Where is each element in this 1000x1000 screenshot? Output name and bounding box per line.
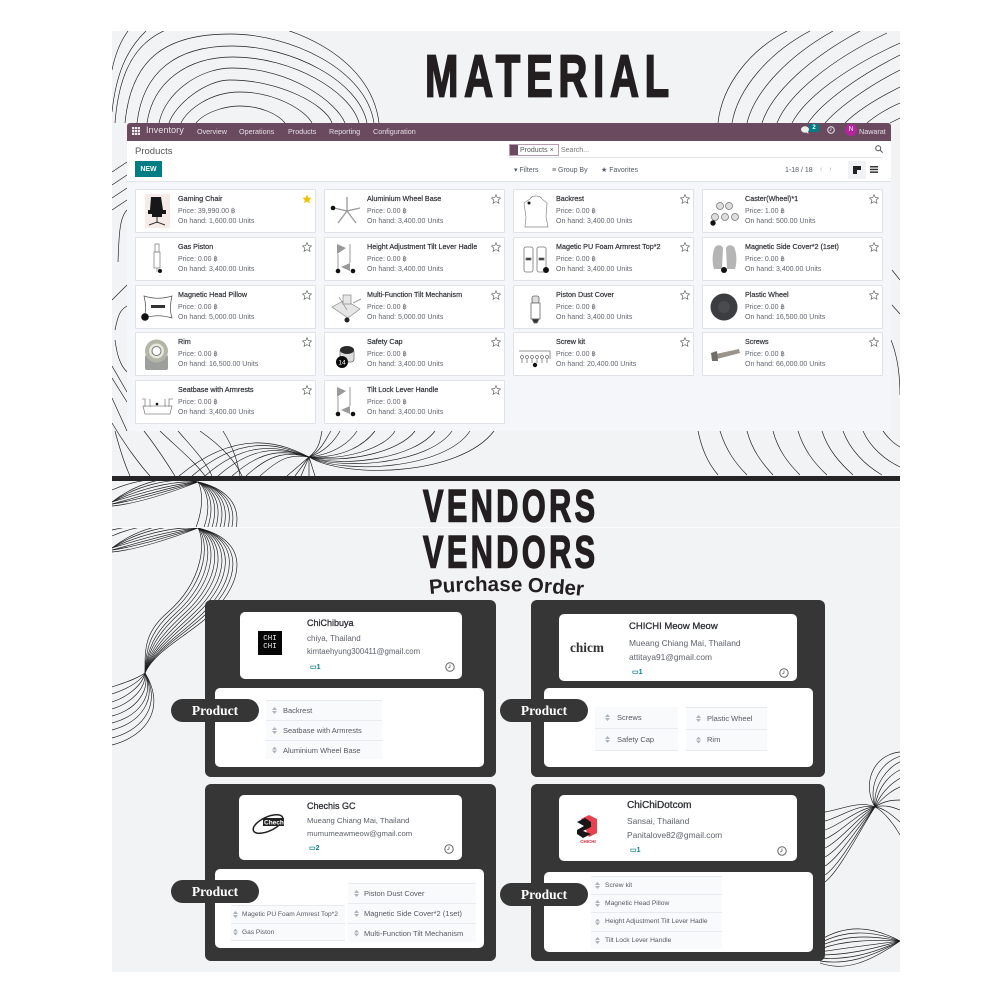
product card: Gas Piston: Price: 0.00 ฿ [178,256,218,263]
vendor name: ChiChibuya [307,618,354,628]
product card: Seatbase with Armrests: Seatbase with Armrests [178,385,254,394]
vendor email: mumumeawmeow@gmail.com [307,829,412,838]
product card: Backrest: Backrest [556,194,584,203]
vendor name: ChiChiDotcom [627,800,691,811]
decorative contour waves [112,31,900,967]
chat badge [809,124,819,132]
product card: Piston Dust Cover [513,285,694,329]
vendor card: ChiChiDotcom [559,795,797,861]
page title: Products: Products [135,146,172,157]
product card: Height Adjustment Tilt Lever Hadle: Height Adjustment Tilt Lever Hadle [367,242,477,251]
product card: Magnetic Side Cover*2 (1set): On hand: 3,400.00 Units [745,266,821,273]
purchase order count: ▭2 [309,845,320,852]
vendor address: Mueang Chiang Mai, Thailand [629,638,741,648]
product card: Aluminium Wheel Base [324,189,505,233]
row: Screws [595,707,678,729]
product card: Backrest: Price: 0.00 ฿ [556,208,596,215]
vendor card: CHICHI Meow Meow [559,614,797,681]
label pill: Product: Product [192,884,238,899]
purchase order count: ▭1 [310,664,321,671]
row: Gas Piston [231,923,345,941]
subtitle: Purchase Order [430,576,584,596]
product card: Safety Cap [324,332,505,376]
control panel [127,141,891,182]
row: Aluminium Wheel Base: Aluminium Wheel Base [283,746,361,755]
product card: Magnetic Head Pillow: On hand: 5,000.00 Units [178,314,254,321]
product card: Multi-Function Tilt Mechanism [324,285,505,329]
product card: Aluminium Wheel Base: On hand: 3,400.00 Units [367,218,443,225]
product card: Magnetic Side Cover*2 (1set): Price: 0.00 ฿ [745,256,785,263]
product card: Screws: Price: 0.00 ฿ [745,351,785,358]
search placeholder: Search... [561,147,589,154]
chat badge: 2 [812,125,816,131]
product card: Piston Dust Cover: Price: 0.00 ฿ [556,304,596,311]
label pill: Product [171,699,259,722]
product card: Gas Piston: Gas Piston [178,242,213,251]
product card: Seatbase with Armrests [135,380,316,424]
product card: Multi-Function Tilt Mechanism: Multi-Function Tilt Mechanism [367,290,462,299]
icon: app grid [132,127,140,135]
product card: Rim: Rim [178,337,191,346]
row: Gas Piston: Gas Piston [242,929,274,936]
product card: Height Adjustment Tilt Lever Hadle [324,237,505,281]
vendor email: Panitalove82@gmail.com [627,830,722,840]
row: Rim: Rim [707,735,720,744]
product card: Screws: Screws [745,337,769,346]
vendor email: kimtaehyung300411@gmail.com [307,647,420,656]
label pill: Product [500,699,588,722]
product card: Magnetic Head Pillow [135,285,316,329]
product card: Gas Piston [135,237,316,281]
product card: Rim [135,332,316,376]
product card: Magnetic Head Pillow: Price: 0.00 ฿ [178,304,218,311]
filter: Favorites: ★ Favorites [601,167,638,174]
row: Magnetic Head Pillow: Magnetic Head Pillow [605,900,669,907]
row: Seatbase with Armrests [266,720,382,740]
product card: Magetic PU Foam Armrest Top*2 [513,237,694,281]
product list: ChiChibuya [266,700,382,755]
row: Magnetic Side Cover*2 (1set) [348,903,476,923]
logo: Chechis [252,814,287,834]
product card: Gaming Chair: Price: 39,990.00 ฿ [178,208,235,215]
vendor panel: Chechis GC [205,784,496,961]
row: Tilt Lock Lever Handle [591,931,722,949]
icon: magnifier [875,145,883,153]
user name: Nawarat [859,127,886,136]
product card: Caster(Wheel)*1: Caster(Wheel)*1 [745,194,798,203]
product list: CHICHI Meow Meow [595,707,767,751]
purchase order count: ▭1 [630,847,641,854]
row: Height Adjustment Tilt Lever Hadle: Height Adjustment Tilt Lever Hadle [605,918,708,925]
product card: Plastic Wheel: Plastic Wheel [745,290,789,299]
filter: Group By: ≡ Group By [552,167,588,174]
subtitle: Purchase Order: Purchase Order [430,576,584,596]
vendor email: attitaya91@gmail.com [629,652,712,662]
icon: clock [777,846,787,856]
product card: Height Adjustment Tilt Lever Hadle: Price: 0.00 ฿ [367,256,407,263]
product card: Caster(Wheel)*1: On hand: 500.00 Units [745,218,816,225]
title: VENDORS upper: VENDORS [423,482,595,532]
product card: Magetic PU Foam Armrest Top*2: On hand: 3,400.00 Units [556,266,632,273]
search filter tag: Products × [520,147,554,154]
row: Backrest: Backrest [283,706,312,715]
background panel [112,31,900,972]
product card: Seatbase with Armrests: Price: 0.00 ฿ [178,399,218,406]
product card: Seatbase with Armrests: On hand: 3,400.00 Units [178,409,254,416]
label pill: Product: Product [521,703,567,718]
product card: Plastic Wheel: Price: 0.00 ฿ [745,304,785,311]
vendor name: Chechis GC [307,801,356,811]
user avatar: N [848,126,854,133]
product card: Screw kit: Screw kit [556,337,585,346]
product card: Backrest [513,189,694,233]
vendor address: Mueang Chiang Mai, Thailand [307,816,409,825]
vendor card: ChiChibuya [240,612,462,679]
nav: Inventory: Inventory [146,125,184,135]
nav bar [127,123,891,141]
logo: chichi wordmark: chicm [570,641,604,656]
view toggle: kanban active [848,161,866,179]
product card: Screws: On hand: 66,000.00 Units [745,361,825,368]
pager arrows: ‹ › [820,166,832,173]
products panel: Chechis GC [215,869,484,948]
product card: Height Adjustment Tilt Lever Hadle: On hand: 3,400.00 Units [367,266,443,273]
label pill: Product [171,880,259,903]
row: Plastic Wheel: Plastic Wheel [707,714,752,723]
logo: CHI CHI [258,631,282,655]
product card: Aluminium Wheel Base: Aluminium Wheel Base [367,194,441,203]
product card: Aluminium Wheel Base: Price: 0.00 ฿ [367,208,407,215]
vendor name: CHICHI Meow Meow [629,621,718,632]
row: Safety Cap: Safety Cap [617,735,654,744]
products panel: CHICHI Meow Meow [544,688,813,767]
view toggle: list [870,166,878,173]
vendor panel: ChiChibuya [205,600,496,777]
pager: 1-18 / 18 [785,167,813,174]
product card: Tilt Lock Lever Handle: On hand: 3,400.00 Units [367,409,443,416]
nav: Overview: Overview [197,127,227,136]
icon: clock [444,844,454,854]
product card: Gas Piston: On hand: 3,400.00 Units [178,266,254,273]
product card: Piston Dust Cover: Piston Dust Cover [556,290,614,299]
row: Screw kit: Screw kit [605,882,632,889]
product card: Safety Cap: On hand: 3,400.00 Units [367,361,443,368]
products panel: ChiChiDotcom [544,872,813,952]
product card: Screws [702,332,883,376]
vendor panel: ChiChiDotcom [531,784,825,961]
product card: Caster(Wheel)*1 [702,189,883,233]
product card: Tilt Lock Lever Handle: Tilt Lock Lever Handle [367,385,438,394]
logo: CHI CHI: CHI [263,635,277,643]
product card: Screw kit: Price: 0.00 ฿ [556,351,596,358]
row: Multi-Function Tilt Mechanism [348,923,476,942]
search underline [509,157,883,158]
row: Aluminium Wheel Base [266,740,382,759]
row: Magnetic Head Pillow [591,894,722,912]
row: Seatbase with Armrests: Seatbase with Armrests [283,726,362,735]
row: Tilt Lock Lever Handle: Tilt Lock Lever Handle [605,937,671,944]
row: Height Adjustment Tilt Lever Hadle [591,912,722,931]
row: Magetic PU Foam Armrest Top*2 [231,905,345,923]
row: Piston Dust Cover: Piston Dust Cover [364,889,424,898]
product card: Tilt Lock Lever Handle: Price: 0.00 ฿ [367,399,407,406]
product card: Rim: On hand: 16,500.00 Units [178,361,258,368]
product card: Screw kit: On hand: 20,400.00 Units [556,361,636,368]
product card: Magetic PU Foam Armrest Top*2: Magetic PU Foam Armrest Top*2 [556,242,661,251]
filter: Filters: ▾ Filters [514,167,539,174]
product card: Magnetic Side Cover*2 (1set) [702,237,883,281]
product card: Multi-Function Tilt Mechanism: On hand: 5,000.00 Units [367,314,443,321]
seam line [112,527,900,528]
label pill: Product: Product [521,887,567,902]
title: VENDORS lower: VENDORS [423,528,595,578]
row: Screws: Screws [617,713,642,722]
button: NEW: NEW [140,166,157,173]
row: Piston Dust Cover [348,883,476,903]
row: Backrest [266,700,382,720]
product card: Safety Cap: 14 [338,360,346,366]
button: NEW [135,161,162,177]
row: Plastic Wheel [686,707,767,729]
icon: clock [779,668,789,678]
icon: clock [445,662,455,672]
product card: Safety Cap: Safety Cap [367,337,403,346]
row: Rim [686,729,767,751]
product card: Magnetic Head Pillow: Magnetic Head Pillow [178,290,247,299]
product card: Plastic Wheel [702,285,883,329]
panel: inventory app [127,123,891,431]
product card: Gaming Chair [135,189,316,233]
product list: Chechis GC [231,883,476,941]
logo: CHICHI gaming chair [577,815,597,844]
product card: Rim: Price: 0.00 ฿ [178,351,218,358]
vendor address: chiya, Thailand [307,634,361,643]
row: Multi-Function Tilt Mechanism: Multi-Function Tilt Mechanism [364,929,463,938]
nav: Operations: Operations [239,127,274,136]
row: Safety Cap [595,729,678,751]
product card: Safety Cap: Price: 0.00 ฿ [367,351,407,358]
divider bar [112,476,900,481]
nav: Products: Products [288,127,316,136]
product card: Gaming Chair: On hand: 1,600.00 Units [178,218,254,225]
user avatar [845,124,857,136]
products panel: ChiChibuya [215,688,484,767]
product card: Backrest: On hand: 3,400.00 Units [556,218,632,225]
product list: ChiChiDotcom [591,876,722,944]
logo: CHI CHI: CHI [263,643,277,651]
nav: Reporting: Reporting [329,127,360,136]
title: MATERIAL: MATERIAL [425,43,669,109]
product card: Magnetic Side Cover*2 (1set): Magnetic Side Cover*2 (1set) [745,242,839,251]
search filter tag [509,144,559,156]
icon: activity clock [827,126,835,134]
label pill: Product: Product [192,703,238,718]
vendor panel: CHICHI Meow Meow [531,600,825,777]
nav: Configuration: Configuration [373,127,416,136]
product card: Multi-Function Tilt Mechanism: Price: 0.00 ฿ [367,304,407,311]
row: Magnetic Side Cover*2 (1set): Magnetic Side Cover*2 (1set) [364,909,462,918]
vendor address: Sansai, Thailand [627,816,689,826]
logo: CHICHI gaming chair: CHICHI [580,839,596,844]
product card: Piston Dust Cover: On hand: 3,400.00 Units [556,314,632,321]
label pill: Product [500,883,588,906]
product card: Gaming Chair: Gaming Chair [178,194,222,203]
product card: Tilt Lock Lever Handle [324,380,505,424]
product card: Magetic PU Foam Armrest Top*2: Price: 0.00 ฿ [556,256,596,263]
row: Magetic PU Foam Armrest Top*2: Magetic PU Foam Armrest Top*2 [242,911,338,918]
vendor card: Chechis GC [239,795,462,860]
product card: Screw kit [513,332,694,376]
product card: Plastic Wheel: On hand: 16,500.00 Units [745,314,825,321]
product card: Caster(Wheel)*1: Price: 1.00 ฿ [745,208,785,215]
purchase order count: ▭1 [632,669,643,676]
icon: chat [801,126,809,134]
row: Screw kit [591,876,722,894]
